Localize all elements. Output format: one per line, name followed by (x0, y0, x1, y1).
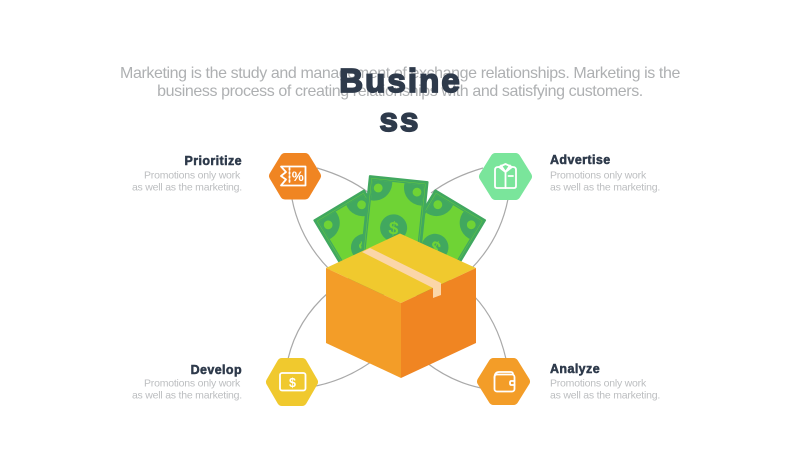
description: as well as the marketing. (550, 182, 660, 194)
title: ss (380, 101, 420, 138)
subtitle text: business process of creating relationships with and satisfying customers. (157, 83, 643, 100)
box top (326, 234, 476, 303)
icon: banknotes (297, 163, 502, 322)
label: Advertise (550, 153, 611, 167)
description: as well as the marketing. (132, 182, 242, 194)
description: as well as the marketing. (132, 390, 242, 402)
step: Prioritize (132, 154, 316, 194)
step: Develop (132, 363, 313, 402)
description: Promotions only work (550, 170, 647, 182)
icon: cardboard box (326, 234, 476, 378)
label: Analyze (550, 362, 600, 376)
title: Busine (339, 62, 462, 99)
description: Promotions only work (144, 378, 241, 390)
title (339, 62, 462, 138)
label: Develop (191, 363, 242, 377)
description (550, 378, 660, 402)
subtitle text (120, 65, 680, 100)
hexagon icon: discount ticket (274, 158, 316, 194)
connecting arcs (288, 168, 508, 388)
description (132, 170, 242, 194)
centre banknote (345, 163, 442, 294)
box left face (326, 268, 401, 378)
hexagon icon: discount ticket: % (292, 169, 304, 184)
description (550, 170, 660, 194)
subtitle text: Marketing is the study and management of exchange relationships. Marketing is the (120, 65, 680, 82)
hexagon icon: dollar bill: $ (289, 376, 296, 390)
description: as well as the marketing. (550, 390, 660, 402)
description: Promotions only work (550, 378, 647, 390)
hexagon icon: wallet (482, 363, 525, 400)
left banknote (297, 173, 432, 322)
step: Advertise (484, 153, 660, 195)
description (132, 378, 242, 402)
hexagon icon: shirt (484, 158, 527, 195)
box right face (401, 268, 476, 378)
label: Prioritize (184, 154, 242, 168)
hexagon icon: dollar bill (271, 363, 313, 401)
description: Promotions only work (144, 170, 241, 182)
step: Analyze (482, 362, 660, 402)
box tape (362, 248, 441, 298)
right banknote (367, 173, 502, 322)
